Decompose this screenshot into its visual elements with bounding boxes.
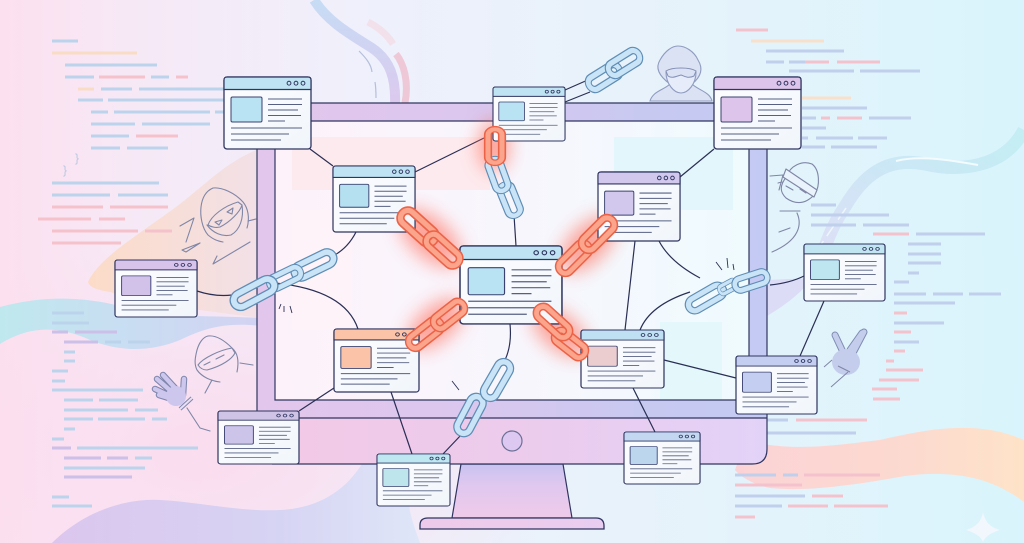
crack marks <box>279 258 734 390</box>
window: lower right <box>581 330 664 388</box>
code lines: left top: } <box>63 163 67 177</box>
window: mid left <box>333 166 415 232</box>
window: bottom right <box>624 432 700 484</box>
wave: top ribbon <box>314 0 406 104</box>
code lines: right top <box>736 30 985 263</box>
window: top center <box>493 87 565 141</box>
hacker: right <box>770 163 818 252</box>
window: top left <box>224 77 311 149</box>
window: lower left <box>334 329 419 392</box>
hacker: left <box>180 188 256 264</box>
code lines: left top: } <box>75 151 79 165</box>
monitor body <box>257 103 767 464</box>
window: far left <box>115 260 197 317</box>
chain: bottom center blue <box>455 359 513 436</box>
icon: right glove <box>824 332 864 387</box>
monitor screen <box>275 121 749 400</box>
chain: left blue <box>231 250 336 310</box>
wave: lavender shard behind monitor <box>766 278 812 316</box>
wave: teal band left <box>0 299 262 349</box>
code lines: left top <box>38 41 224 243</box>
window: bottom left <box>218 411 299 464</box>
wave: peach blob <box>88 148 262 318</box>
sparkle star <box>966 512 1000 542</box>
window: bottom center <box>377 454 450 506</box>
chain: top blue <box>586 48 642 92</box>
window: center <box>460 246 562 324</box>
code lines: left bottom <box>52 313 198 506</box>
chain: lower right red <box>534 304 588 360</box>
chain: lower left red <box>406 299 467 351</box>
wave: orange band right <box>735 428 1024 502</box>
icon: left glove <box>155 375 192 409</box>
hacker: lower left <box>187 336 253 431</box>
monitor base <box>420 518 604 529</box>
wave: purple blob bottom left <box>52 464 420 543</box>
monitor <box>257 103 767 529</box>
chain: upper left red <box>397 207 463 269</box>
connector lines <box>197 79 824 454</box>
window: right <box>804 244 885 301</box>
chain: upper right red <box>556 215 617 276</box>
monitor stand <box>452 464 572 518</box>
chain: top center red and blue <box>486 129 522 218</box>
wave: right ribbon <box>820 130 1024 250</box>
window: right lower <box>736 356 817 414</box>
monitor power button <box>502 431 522 451</box>
window: top right <box>714 77 801 149</box>
window: mid right <box>598 172 680 241</box>
code lines: right lower <box>735 273 1001 517</box>
hacker: top <box>650 46 712 101</box>
red glows <box>388 120 627 368</box>
chain: right blue <box>686 270 769 313</box>
